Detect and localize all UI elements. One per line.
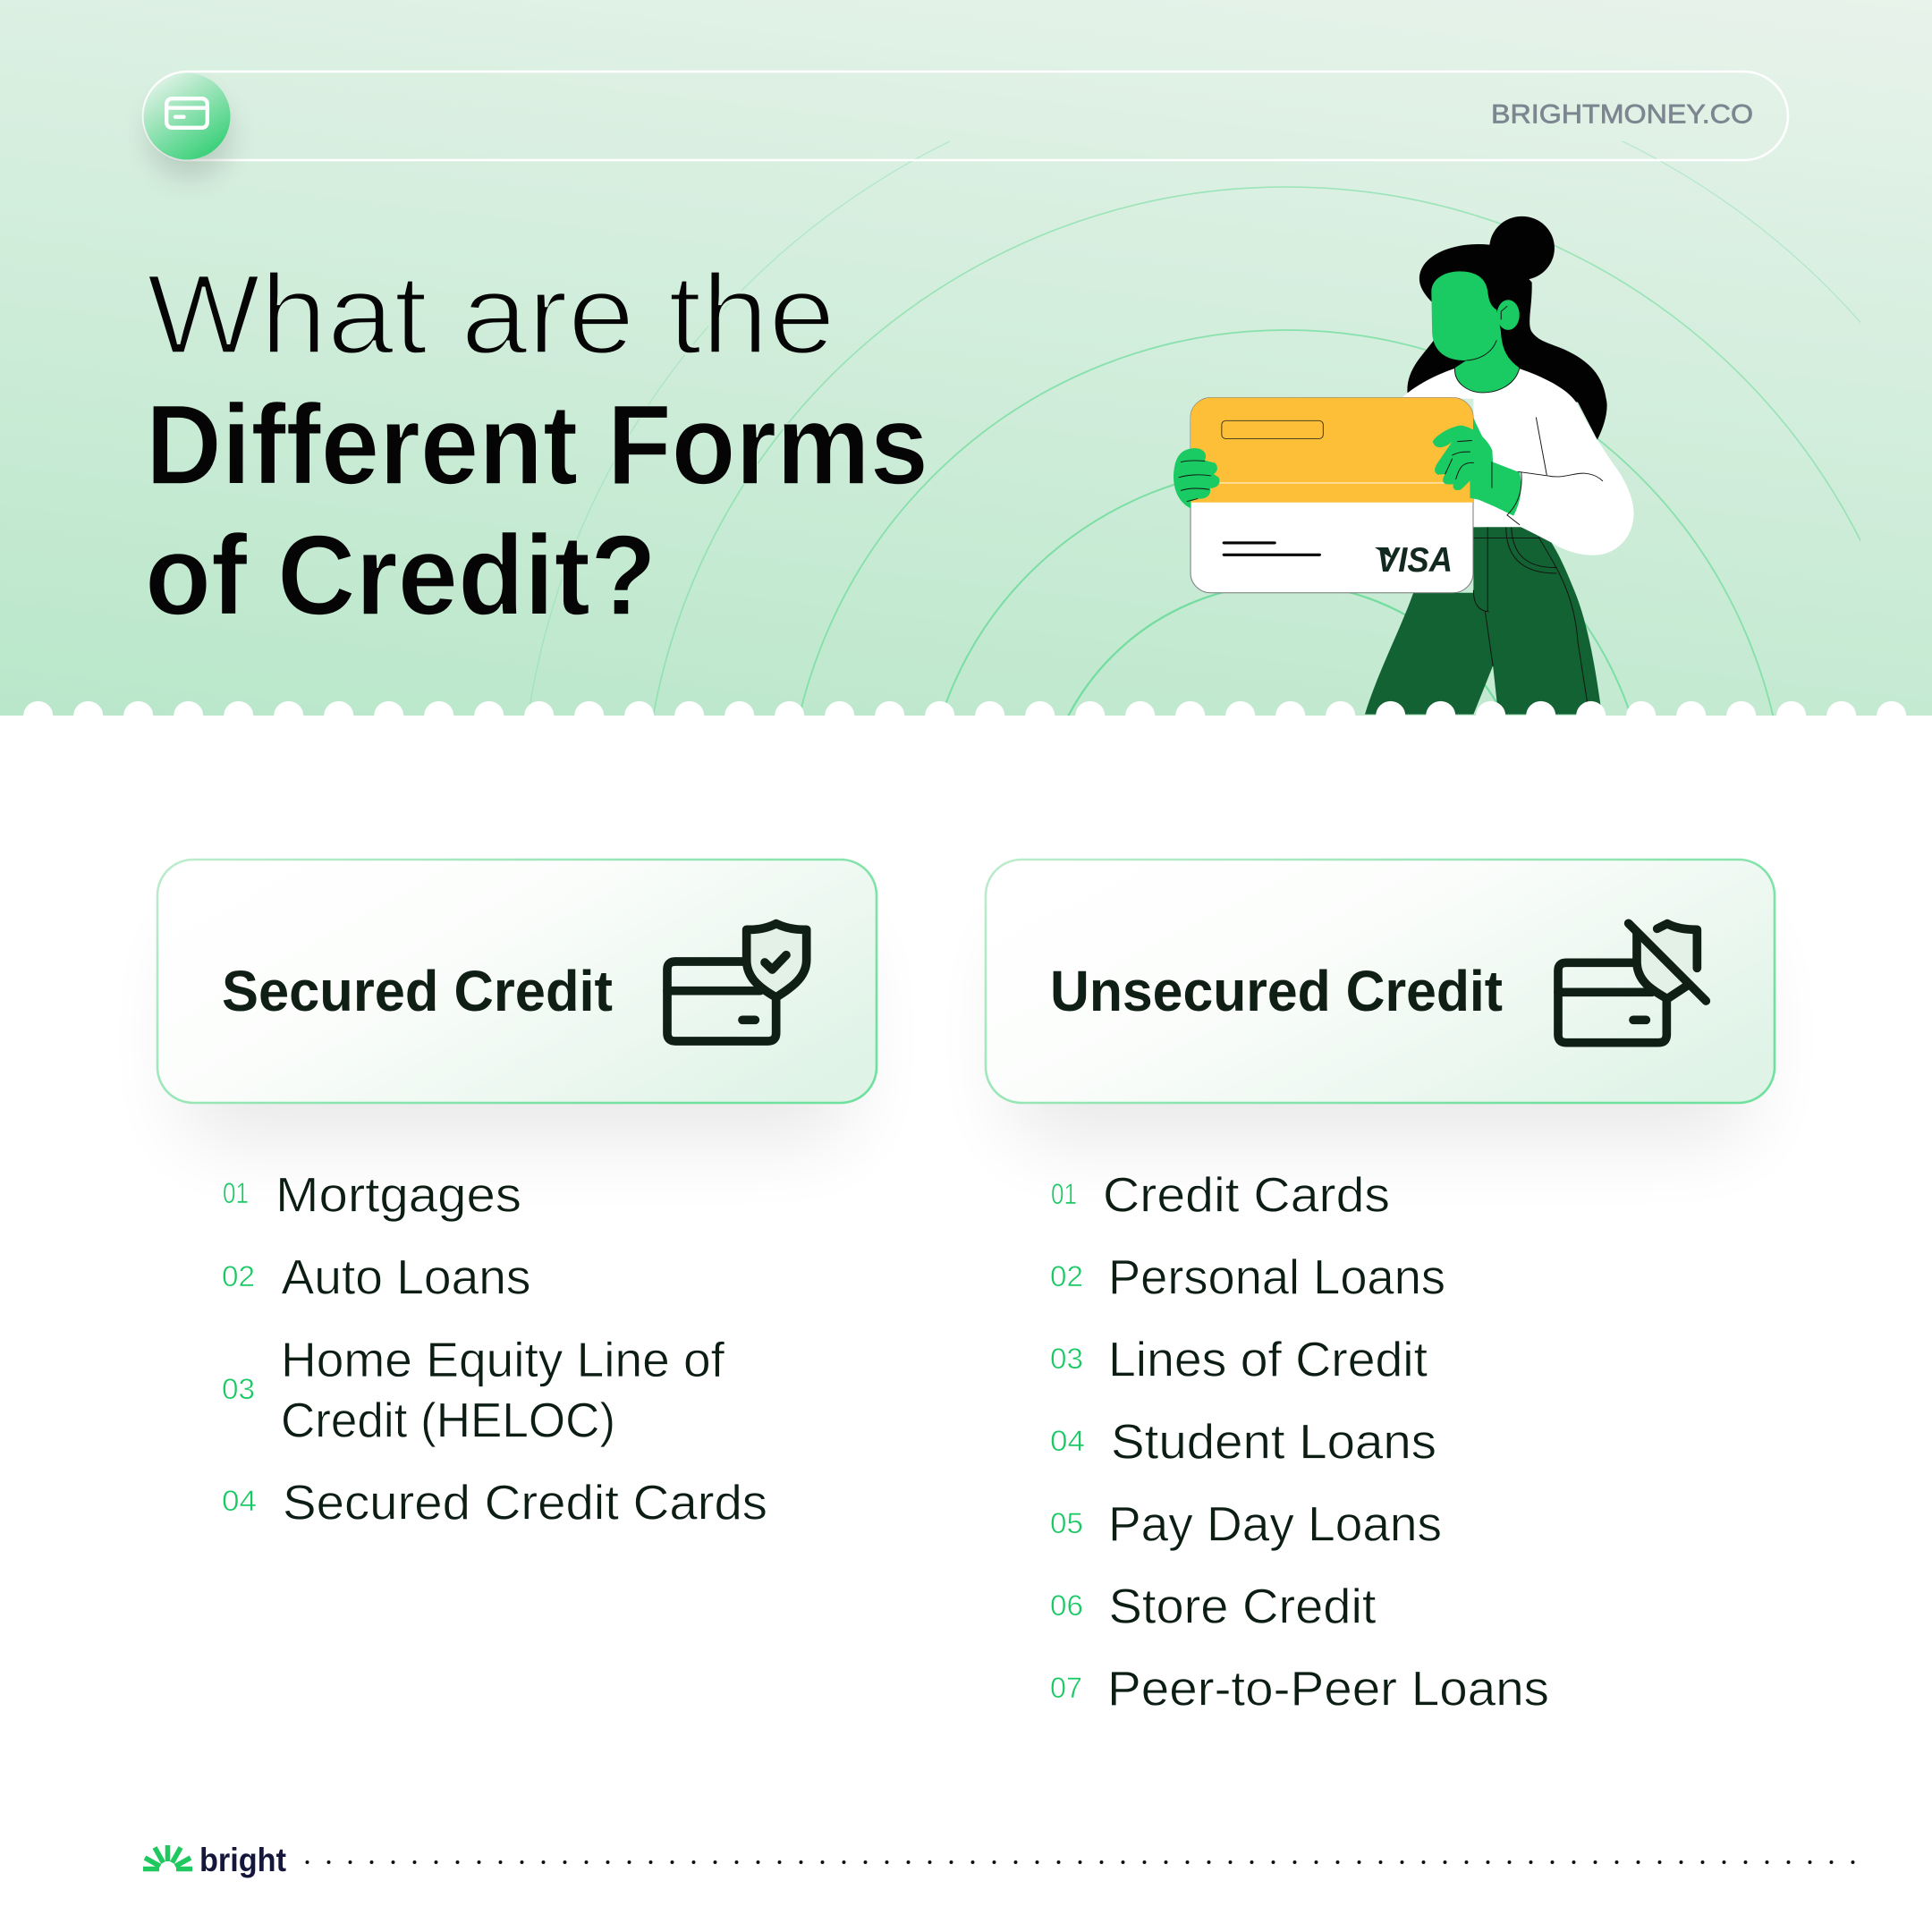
hair xyxy=(1407,216,1607,440)
item 02 auto loans: 02 xyxy=(222,1260,255,1292)
item 06 store credit: 06 xyxy=(1050,1589,1083,1622)
shirt xyxy=(1401,369,1634,555)
logo: bright: bright xyxy=(199,1842,286,1878)
panel: secured credit header card xyxy=(157,860,877,1140)
item 03 home equity line of credit: 03 xyxy=(222,1373,255,1405)
trousers xyxy=(1365,527,1602,715)
illustration: woman holding a credit card xyxy=(1174,216,1634,715)
item 01 credit cards: Credit Cards xyxy=(1103,1166,1390,1222)
credit card xyxy=(1191,398,1473,593)
VISA logo: VISA xyxy=(1377,541,1453,580)
top pill bar with website xyxy=(143,72,1788,160)
heading: unsecured credit: Unsecured Credit xyxy=(1050,959,1503,1023)
item 07 peer-to-peer loans: Peer-to-Peer Loans xyxy=(1107,1660,1549,1716)
right hand xyxy=(1433,418,1521,516)
left hand xyxy=(1174,448,1219,508)
icon: card with shield and tick xyxy=(667,924,807,1041)
item 06 store credit: Store Credit xyxy=(1109,1578,1376,1633)
item 02 personal loans: 02 xyxy=(1050,1260,1083,1292)
item 03 home equity line of credit: Home Equity Line of xyxy=(281,1332,725,1387)
item 01 mortgages: 01 xyxy=(223,1177,249,1209)
item 04 secured credit cards: 04 xyxy=(222,1485,257,1517)
item 02 personal loans: Personal Loans xyxy=(1108,1249,1445,1304)
header background band xyxy=(0,0,1932,716)
panel: unsecured credit header card xyxy=(986,860,1775,1140)
list: secured credit types xyxy=(222,1166,767,1530)
icon: card with crossed-out shield xyxy=(1558,923,1706,1043)
item 05 pay day loans: 05 xyxy=(1050,1507,1083,1539)
item 04 student loans: Student Loans xyxy=(1111,1413,1436,1469)
scalloped edge xyxy=(0,701,1932,731)
item 03 home equity line of credit: Credit (HELOC) xyxy=(281,1392,615,1447)
item 05 pay day loans: Pay Day Loans xyxy=(1108,1496,1442,1551)
heading: secured credit: Secured Credit xyxy=(222,959,613,1023)
logo: bright xyxy=(143,1842,286,1878)
item 02 auto loans: Auto Loans xyxy=(281,1249,531,1304)
item 01 mortgages: Mortgages xyxy=(275,1166,521,1222)
title: of Credit? xyxy=(145,512,657,639)
title: What are the xyxy=(147,250,835,377)
item 04 student loans: 04 xyxy=(1050,1425,1085,1457)
item 03 home equity line of credit xyxy=(222,1332,725,1447)
title xyxy=(145,250,928,639)
item 04 secured credit cards: Secured Credit Cards xyxy=(283,1474,767,1530)
website url: BRIGHTMONEY.CO xyxy=(1491,100,1753,129)
face and neck xyxy=(1431,271,1520,393)
dotted footer line xyxy=(308,1860,1862,1864)
item 07 peer-to-peer loans: 07 xyxy=(1050,1672,1082,1704)
item 01 credit cards: 01 xyxy=(1051,1178,1077,1210)
title: Different Forms xyxy=(146,381,928,508)
list: unsecured credit types xyxy=(1050,1166,1549,1716)
icon: credit card badge xyxy=(143,73,231,177)
item 03 lines of credit: 03 xyxy=(1050,1343,1083,1375)
item 03 lines of credit: Lines of Credit xyxy=(1108,1331,1428,1386)
